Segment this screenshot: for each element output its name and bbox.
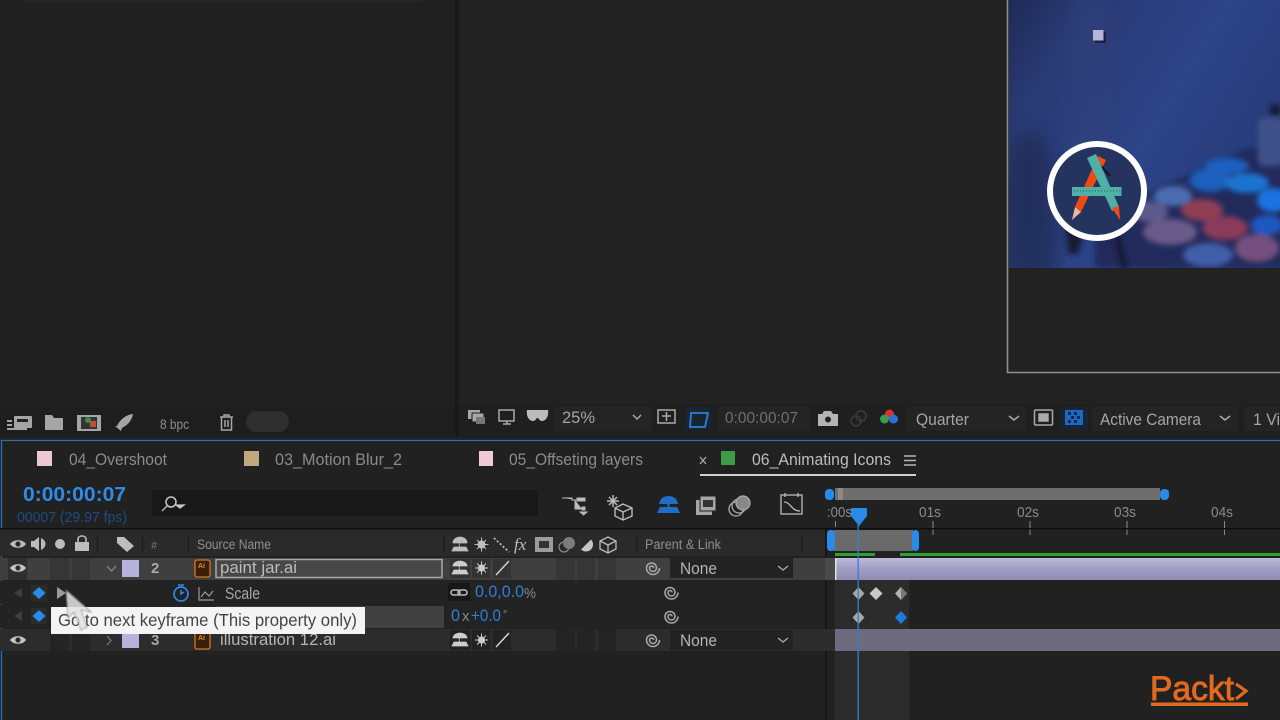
layer column header <box>0 528 1280 556</box>
current time readout <box>17 484 127 526</box>
icon: safe margins <box>658 410 675 423</box>
icon: trash <box>220 415 233 430</box>
switches header icons: fx <box>514 535 527 554</box>
property row: Rotation: x <box>462 608 470 625</box>
playhead <box>851 508 867 720</box>
icon: pick whip spiral <box>665 612 678 623</box>
icon: audio <box>31 537 46 551</box>
icon: mouse cursor <box>66 590 91 630</box>
tab: 05_Offseting layers: 05_Offseting layers <box>509 450 643 469</box>
icon: solo dot <box>55 539 65 549</box>
tab: 04_Overshoot: 04_Overshoot <box>69 450 167 469</box>
icon: snapshot camera <box>818 411 838 426</box>
comp frame border <box>1008 0 1280 372</box>
panel: timeline <box>0 440 1280 720</box>
search box <box>152 490 538 516</box>
current time box: 0:00:00:07 <box>725 410 798 427</box>
time navigator <box>825 488 1169 500</box>
icon: rocket <box>115 414 133 431</box>
switches header icons <box>452 535 616 554</box>
icon: lock <box>75 536 89 551</box>
time ruler: 02s <box>1017 504 1039 521</box>
icon: frame blending <box>696 496 716 515</box>
icon: region of interest <box>1034 410 1052 425</box>
layer row 2: paint jar.ai <box>0 558 1280 580</box>
layer row 3: illustration 12.ai: illustration 12.ai <box>220 631 336 649</box>
number column: # <box>151 540 158 552</box>
icon: mask <box>527 410 548 421</box>
layer row 3: illustration 12.ai: Ai <box>198 635 205 642</box>
quality dropdown: Quarter <box>916 410 969 429</box>
icon: pick whip spiral <box>665 588 678 599</box>
timeline switches toolbar <box>562 493 802 520</box>
icon: always preview <box>468 410 485 424</box>
views dropdown <box>1244 406 1280 431</box>
time ruler <box>827 504 1233 535</box>
icon: composition flowchart <box>562 498 587 515</box>
layer row 3: illustration 12.ai <box>0 629 1280 651</box>
tooltip: Go to next keyframe (This property only) <box>58 610 357 630</box>
panel: project <box>0 0 455 408</box>
magnification dropdown <box>555 406 652 431</box>
time ruler: 03s <box>1114 504 1136 521</box>
icon: shy layers active <box>657 496 680 513</box>
icon: label tag <box>117 537 134 552</box>
layer row 2: paint jar.ai: None <box>680 559 717 578</box>
icon: graph editor <box>781 493 802 514</box>
icon: new composition <box>77 415 101 431</box>
property row: Rotation <box>0 605 825 628</box>
toolbar: viewer controls <box>459 404 1280 437</box>
property row: Scale: Scale <box>225 585 260 603</box>
shaded keyframe range <box>835 580 909 720</box>
current time readout: 00007 (29.97 fps) <box>17 510 127 526</box>
tab: 06_Animating Icons active: 06_Animating Icons <box>752 450 891 469</box>
tab: 03_Motion Blur_2: 03_Motion Blur_2 <box>275 450 402 469</box>
icon: show snapshot <box>851 411 866 426</box>
property row: Scale: 0.0,0.0 <box>475 582 524 601</box>
render cache green line <box>835 553 1280 556</box>
icon: folder <box>45 415 63 430</box>
magnification dropdown: 25% <box>562 408 595 427</box>
icon: parent pick whip spiral <box>646 563 660 575</box>
camera dropdown: Active Camera <box>1100 410 1201 429</box>
time ruler: 04s <box>1211 504 1233 521</box>
time ruler: 01s <box>919 504 941 521</box>
panel: composition viewer <box>1006 0 1280 374</box>
property row: Rotation: +0.0 <box>471 606 501 625</box>
time ruler: :00s <box>827 504 852 521</box>
icon: transparency grid <box>1060 407 1088 430</box>
property row: Scale <box>0 581 825 604</box>
property row: Scale: % <box>524 585 536 602</box>
bit depth label: 8 bpc <box>160 417 189 432</box>
icon: draft 3D <box>607 495 632 520</box>
toolbar: project panel footer <box>0 408 455 437</box>
quality dropdown <box>907 406 1026 431</box>
work area bar <box>827 530 919 551</box>
tab: 06_Animating Icons active <box>700 450 916 476</box>
blurred paint palette photo <box>1009 0 1280 268</box>
logo: Packt: Packt <box>1150 670 1235 708</box>
source name heading: Source Name <box>197 537 271 552</box>
small lavender square layer <box>1093 30 1106 43</box>
current time box <box>717 406 811 431</box>
icon: eye <box>10 540 26 548</box>
current time readout: 0:00:00:07 <box>23 484 126 506</box>
layer row 2: paint jar.ai: Ai <box>198 563 205 570</box>
icon: motion blur <box>729 496 750 516</box>
layer row 3: illustration 12.ai: 3 <box>151 632 159 649</box>
icon: parent pick whip spiral <box>646 635 660 646</box>
layer row 3: illustration 12.ai: None <box>680 631 717 650</box>
camera dropdown <box>1092 406 1238 431</box>
icon: channels <box>880 410 898 424</box>
icon: circle badge with pencils and ruler <box>1050 144 1144 238</box>
parent and link heading: Parent & Link <box>645 537 721 552</box>
keyframes: Scale <box>852 587 907 600</box>
composition tabs <box>37 450 916 476</box>
icon: monitor <box>499 410 514 424</box>
layer row 2: paint jar.ai: 2 <box>151 560 159 577</box>
property row: Rotation: 0 <box>451 606 460 625</box>
property row: Rotation: ° <box>503 609 507 621</box>
icon: interpret footage <box>7 416 32 430</box>
pill control <box>246 411 289 432</box>
layer row 2: paint jar.ai: paint jar.ai <box>220 559 297 577</box>
keyframes: Rotation <box>852 611 907 624</box>
icon: mask toggle active <box>685 407 711 429</box>
